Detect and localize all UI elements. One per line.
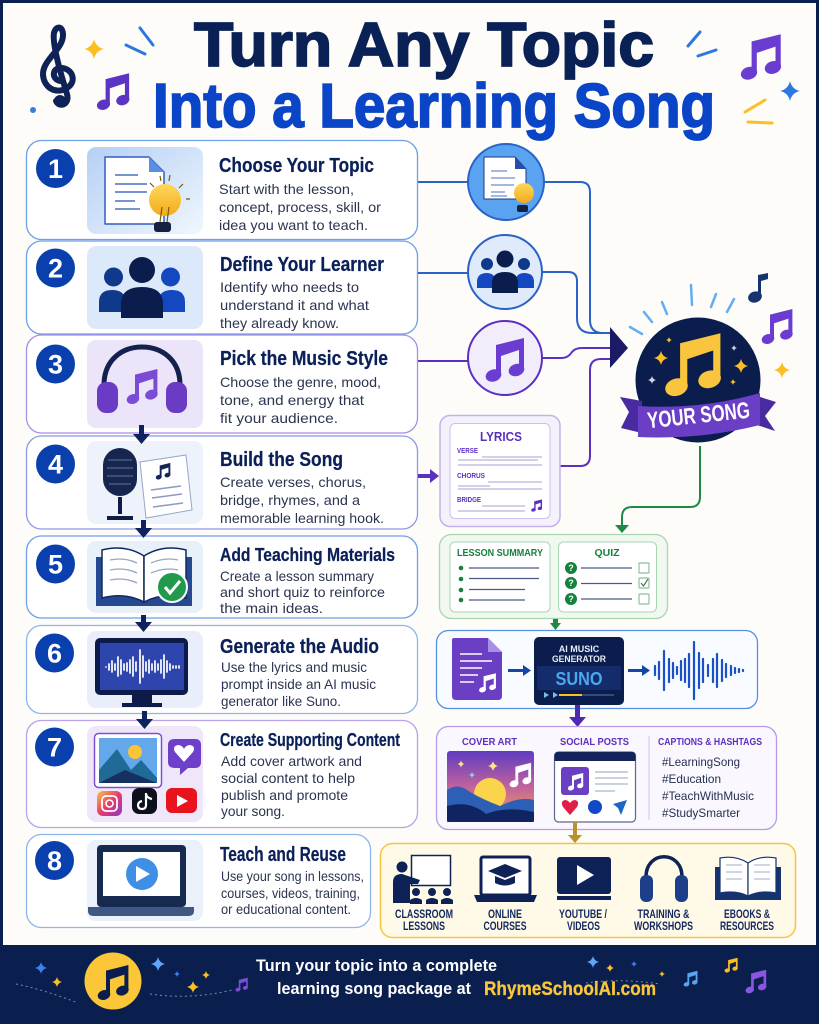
cover art bbox=[447, 751, 534, 822]
quiz: ? bbox=[568, 578, 574, 588]
title: Turn Any Topic bbox=[194, 11, 654, 80]
panel: step 4: 4 bbox=[48, 450, 63, 480]
hashtags: #StudySmarter bbox=[662, 806, 740, 820]
panel: step 5 bbox=[26, 536, 418, 618]
arrow: content to reuse bbox=[568, 822, 582, 843]
arrow: into song bbox=[610, 327, 628, 368]
panel: lyrics sheet: BRIDGE bbox=[457, 495, 481, 504]
panel: lyrics sheet bbox=[440, 416, 560, 526]
hashtags: #Education bbox=[662, 772, 721, 786]
panel: step 7: Add cover artwork and bbox=[221, 754, 362, 769]
quiz bbox=[558, 542, 656, 612]
lesson summary: LESSON SUMMARY bbox=[457, 547, 543, 559]
hashtags: #TeachWithMusic bbox=[662, 789, 754, 803]
icon: open book with check bbox=[87, 541, 203, 613]
panel: step 2: Identify who needs to bbox=[220, 280, 359, 295]
title: Into a Learning Song bbox=[153, 72, 715, 141]
arrow bbox=[628, 665, 650, 676]
panel: step 6: prompt inside an AI music bbox=[221, 677, 376, 692]
panel: step 8: or educational content. bbox=[221, 902, 351, 917]
footer message: Turn your topic into a complete bbox=[256, 956, 497, 975]
labels: LESSONS bbox=[403, 921, 445, 933]
panel: lyrics sheet: LYRICS bbox=[480, 429, 522, 444]
panel: supporting content: SOCIAL POSTS bbox=[560, 737, 629, 748]
panel: step 5: 5 bbox=[48, 550, 63, 580]
labels: EBOOKS & bbox=[724, 909, 770, 921]
icon: classroom bbox=[393, 856, 453, 904]
labels: TRAINING & bbox=[638, 909, 690, 921]
icon: your song badge bbox=[620, 273, 794, 442]
panel: step 2: understand it and what bbox=[220, 298, 369, 313]
panel: lyrics sheet: VERSE bbox=[457, 446, 478, 455]
icon: video player bbox=[557, 857, 611, 900]
panel: step 3: 3 bbox=[48, 350, 63, 380]
icon: headphones bbox=[640, 857, 688, 902]
panel: audio generation bbox=[436, 630, 758, 708]
panel: step 7 bbox=[26, 720, 418, 828]
panel: supporting content: COVER ART bbox=[462, 737, 517, 748]
connector lines bbox=[418, 182, 700, 526]
panel: step 3: tone, and energy that bbox=[220, 393, 364, 408]
panel: step 4: Create verses, chorus, bbox=[220, 475, 366, 490]
panel: step 7: publish and promote bbox=[221, 788, 348, 803]
icon: treble clef and left decorations bbox=[30, 28, 153, 113]
labels: CLASSROOM bbox=[395, 909, 453, 921]
footer message: RhymeSchoolAI.com bbox=[484, 979, 656, 1000]
labels: RESOURCES bbox=[720, 921, 774, 933]
icon: monitor with waveform bbox=[87, 631, 203, 708]
icon: gold music note bbox=[84, 952, 142, 1010]
panel: step 3: Choose the genre, mood, bbox=[220, 375, 381, 390]
panel: step 7: Create Supporting Content bbox=[220, 730, 400, 750]
icon: right decorations bbox=[688, 32, 800, 123]
panel: step 8: Use your song in lessons, bbox=[221, 869, 364, 884]
panel: step 6: Generate the Audio bbox=[220, 636, 379, 658]
icon: your song badge: YOUR SONG bbox=[646, 397, 751, 433]
panel: step 4: memorable learning hook. bbox=[220, 511, 384, 526]
panel: step 8: Teach and Reuse bbox=[220, 844, 346, 866]
panel: step 3: fit your audience. bbox=[220, 411, 338, 426]
panel: step 6 bbox=[26, 626, 418, 714]
icon: online course laptop bbox=[474, 857, 537, 902]
panel: step 8: 8 bbox=[47, 846, 62, 876]
panel: step 7: 7 bbox=[47, 732, 62, 762]
arrows between steps bbox=[133, 425, 153, 729]
quiz: ? bbox=[568, 563, 574, 573]
panel: step 3: Pick the Music Style bbox=[220, 348, 388, 370]
panel: step 2 bbox=[26, 241, 418, 334]
labels: COURSES bbox=[484, 921, 527, 933]
footer message: learning song package at bbox=[277, 979, 471, 998]
suno generator screen: SUNO bbox=[556, 669, 602, 689]
hashtags bbox=[662, 755, 754, 820]
panel: ways to reuse bbox=[380, 844, 796, 938]
footer bbox=[16, 952, 767, 1010]
arrow: generator to content bbox=[569, 705, 586, 727]
panel: step 5: and short quiz to reinforce bbox=[220, 585, 385, 600]
panel: step 1 bbox=[26, 140, 418, 240]
panel: step 1: concept, process, skill, or bbox=[219, 200, 381, 215]
footer message bbox=[256, 956, 656, 1000]
arrow: song to lesson bbox=[615, 525, 629, 533]
icon: laptop with play button bbox=[87, 840, 203, 921]
panel: step 8 bbox=[26, 834, 370, 928]
icon: source topic circle bbox=[468, 144, 544, 220]
panel: step 4: Build the Song bbox=[220, 449, 343, 471]
panel: step 5: Create a lesson summary bbox=[220, 569, 374, 584]
panel: step 1: 1 bbox=[48, 154, 63, 184]
panel: step 1: idea you want to teach. bbox=[219, 218, 368, 233]
panel: teaching materials bbox=[440, 534, 668, 618]
arrow: build to lyrics bbox=[418, 469, 439, 483]
title bbox=[153, 11, 715, 141]
footer stars and notes bbox=[16, 956, 767, 1003]
suno generator screen: AI MUSIC bbox=[559, 644, 600, 654]
panel: step 7: social content to help bbox=[221, 771, 355, 786]
icon: learner circle bbox=[468, 235, 542, 309]
panel: step 1: Start with the lesson, bbox=[219, 182, 354, 197]
panel: step 6: generator like Suno. bbox=[221, 694, 341, 709]
panel: step 4: bridge, rhymes, and a bbox=[220, 493, 360, 508]
panel: step 7: your song. bbox=[221, 804, 285, 819]
panel: step 2: 2 bbox=[48, 254, 63, 284]
panel: step 3 bbox=[26, 335, 418, 433]
panel: step 5: the main ideas. bbox=[220, 601, 323, 616]
icon: document and bulb bbox=[87, 147, 203, 234]
suno generator screen: GENERATOR bbox=[552, 654, 606, 664]
panel: step 2: they already know. bbox=[220, 316, 339, 331]
labels: YOUTUBE / bbox=[559, 909, 608, 921]
panel: step 8: courses, videos, training, bbox=[221, 886, 360, 901]
icon: purple document bbox=[452, 638, 502, 700]
waveform bbox=[655, 642, 743, 699]
social post bbox=[554, 752, 636, 822]
panel: step 6: 6 bbox=[47, 638, 62, 668]
labels bbox=[395, 909, 774, 933]
icon: music style circle bbox=[468, 321, 542, 395]
arrow: materials to generator bbox=[550, 619, 561, 630]
quiz: ? bbox=[568, 594, 574, 604]
labels: ONLINE bbox=[488, 909, 522, 921]
lesson summary bbox=[450, 542, 550, 612]
labels: VIDEOS bbox=[567, 921, 600, 933]
panel: step 1: Choose Your Topic bbox=[219, 155, 374, 177]
panel: step 5: Add Teaching Materials bbox=[220, 545, 395, 565]
icon: open book bbox=[715, 857, 781, 900]
icon: headphones bbox=[87, 340, 203, 428]
arrow bbox=[508, 665, 531, 676]
hashtags: #LearningSong bbox=[662, 755, 740, 769]
panel: supporting content: CAPTIONS & HASHTAGS bbox=[658, 737, 762, 748]
panel: lyrics sheet: CHORUS bbox=[457, 471, 485, 480]
icon: learners bbox=[87, 246, 203, 329]
panel: supporting content bbox=[436, 726, 776, 830]
icon: cover art and social platforms bbox=[87, 726, 203, 822]
icon: microphone and lyric sheet bbox=[87, 441, 203, 524]
quiz: QUIZ bbox=[594, 547, 620, 559]
panel: step 6: Use the lyrics and music bbox=[221, 660, 367, 675]
panel: step 4 bbox=[26, 436, 418, 529]
labels: WORKSHOPS bbox=[634, 921, 693, 933]
suno generator screen bbox=[534, 637, 624, 705]
panel: step 2: Define Your Learner bbox=[220, 254, 384, 276]
